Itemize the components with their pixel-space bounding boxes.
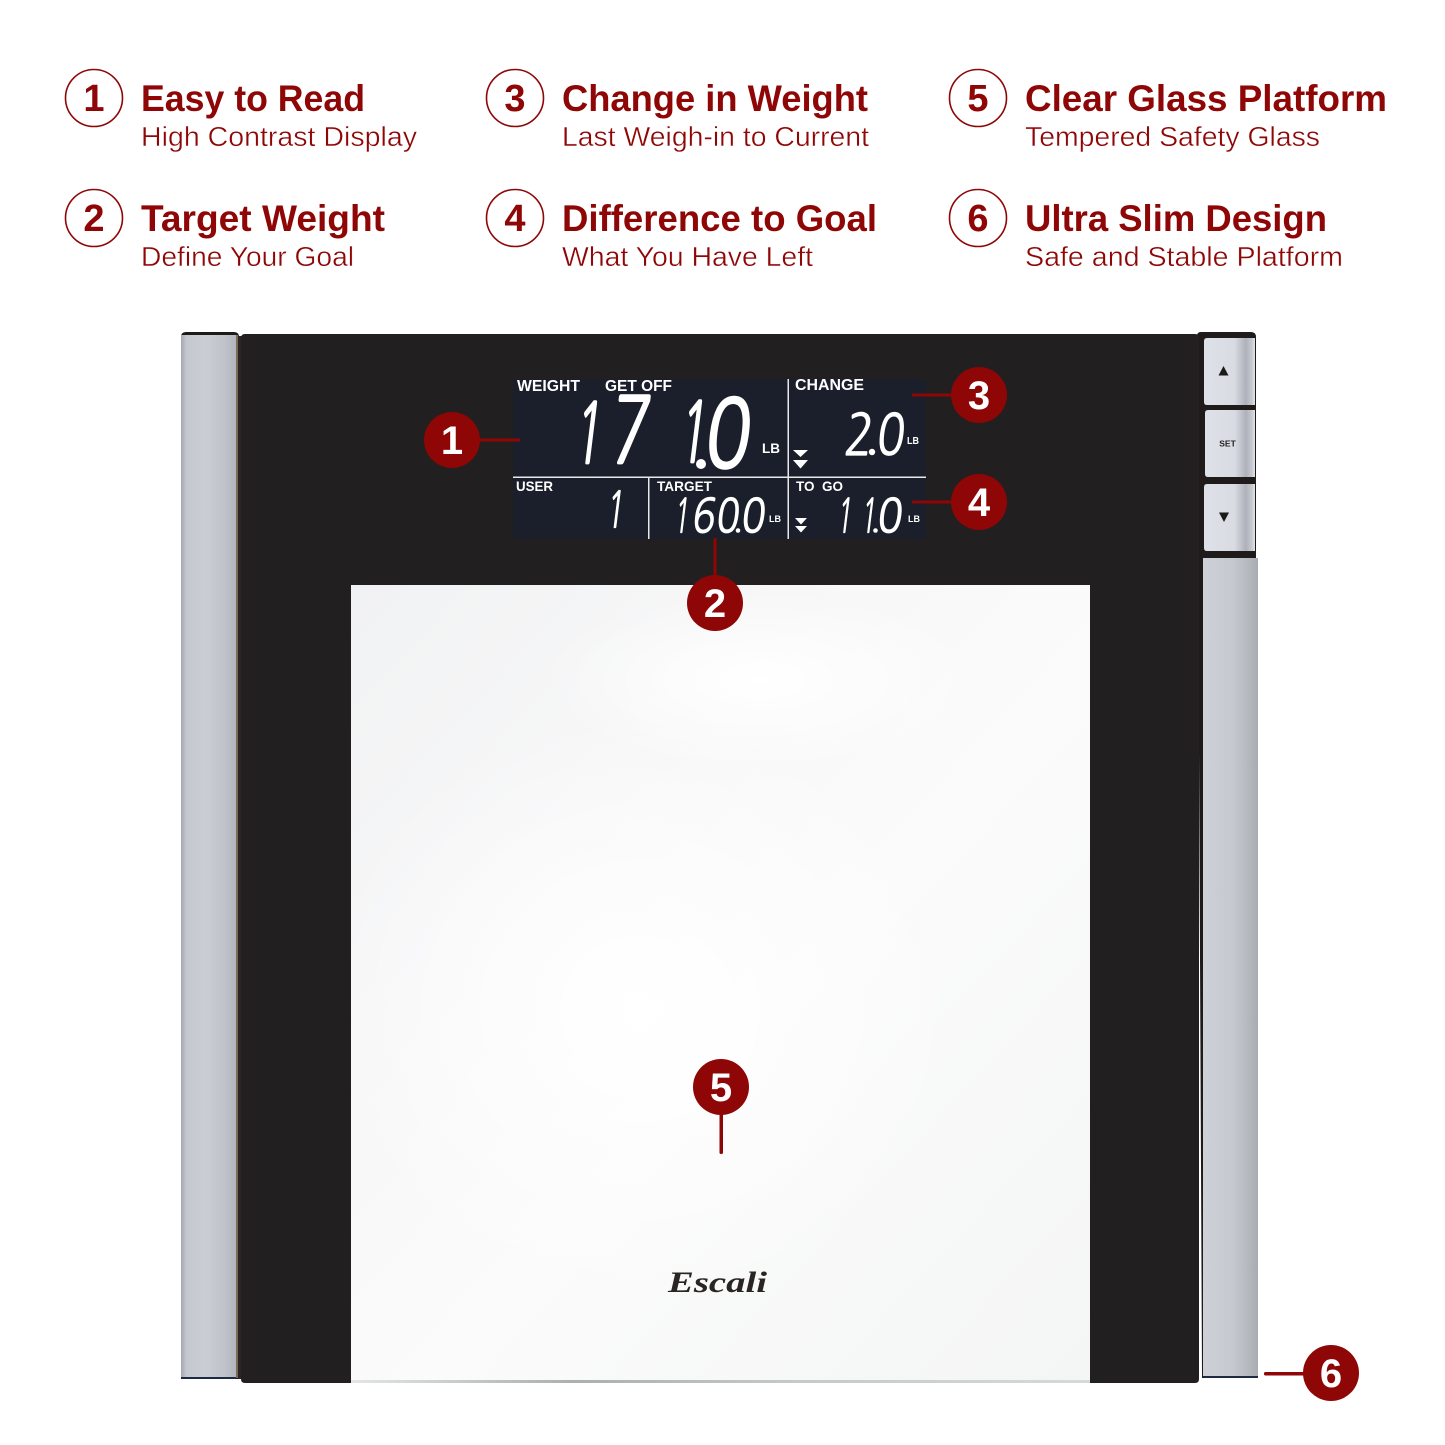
feature: Ultra Slim Design — [950, 190, 1343, 272]
target panel: 6 — [690, 493, 719, 539]
to go panel: 1 — [835, 493, 856, 539]
black scale body — [241, 334, 1199, 1383]
user panel — [516, 478, 628, 535]
weight panel: 1 — [676, 391, 714, 474]
feature: Clear Glass Platform: Clear Glass Platform — [1025, 78, 1387, 119]
feature: Target Weight: Define Your Goal — [141, 241, 354, 272]
feature: Change in Weight — [486, 70, 869, 152]
target panel: 0 — [739, 493, 769, 539]
feature: Target Weight: Target Weight — [141, 198, 385, 239]
user panel: USER — [516, 478, 553, 494]
feature: Ultra Slim Design: Safe and Stable Platform — [1025, 241, 1343, 272]
feature: Easy to Read: High Contrast Display — [141, 121, 417, 152]
target panel: 1 — [672, 493, 693, 539]
callout 1: 1 — [441, 419, 463, 463]
button: down — [1204, 484, 1255, 551]
callout 6 — [1264, 1345, 1359, 1401]
feature: Difference to Goal: Difference to Goal — [562, 198, 877, 239]
weight panel: 7 — [605, 386, 656, 477]
feature: Clear Glass Platform — [950, 70, 1387, 152]
to go panel: 0 — [875, 493, 906, 539]
feature: Change in Weight: Change in Weight — [562, 78, 868, 119]
weight panel: 0 — [700, 386, 758, 482]
change panel — [793, 377, 919, 468]
feature: Change in Weight: Last Weigh-in to Current — [562, 121, 869, 152]
logo: Escali — [667, 1266, 768, 1299]
scale product — [181, 332, 1258, 1383]
callout 2: 2 — [704, 582, 726, 626]
callout 5 — [693, 1059, 749, 1154]
feature: Ultra Slim Design: Ultra Slim Design — [1025, 198, 1327, 239]
callout 1 — [424, 412, 520, 468]
target panel — [657, 478, 781, 539]
right rail frame — [1197, 332, 1258, 1378]
callout 3: 3 — [968, 374, 990, 418]
feature: Target Weight: 2 — [83, 198, 105, 240]
feature: Target Weight — [66, 190, 385, 272]
target panel: TARGET — [657, 478, 712, 494]
change panel: LB — [907, 436, 919, 447]
weight panel — [517, 378, 780, 482]
to go panel: LB — [908, 514, 920, 525]
LCD display — [513, 377, 926, 539]
callout 6: 6 — [1320, 1352, 1342, 1396]
button: set: SET — [1219, 438, 1237, 448]
change panel: 0 — [874, 407, 909, 464]
target panel: 0 — [714, 493, 743, 539]
weight panel: WEIGHT — [517, 378, 581, 395]
target panel: LB — [769, 514, 781, 524]
feature: Difference to Goal: 4 — [504, 198, 526, 240]
feature: Clear Glass Platform: 5 — [967, 78, 989, 120]
feature: Change in Weight: 3 — [504, 78, 526, 120]
to go panel: 1 — [859, 493, 880, 539]
lower right silver rail — [1203, 558, 1258, 1378]
feature: Difference to Goal — [486, 190, 877, 272]
to go panel — [795, 478, 920, 539]
feature: Easy to Read: Easy to Read — [141, 78, 365, 119]
button: up — [1204, 338, 1255, 405]
button: set — [1205, 410, 1255, 477]
glass platform — [320, 585, 1090, 1383]
change panel: 2 — [842, 407, 877, 464]
feature: Clear Glass Platform: Tempered Safety Glass — [1025, 121, 1320, 152]
weight panel: LB — [762, 441, 780, 456]
change panel: CHANGE — [795, 377, 864, 394]
weight panel: 1 — [571, 392, 609, 475]
feature: Ultra Slim Design: 6 — [967, 198, 989, 240]
callout 4 — [912, 474, 1007, 530]
feature: Difference to Goal: What You Have Left — [562, 241, 813, 272]
callout 4: 4 — [968, 481, 991, 525]
feature: Easy to Read — [66, 70, 417, 152]
user panel: 1 — [604, 486, 628, 535]
callout 2 — [687, 538, 743, 631]
callout 5: 5 — [710, 1066, 732, 1110]
weight panel: GET OFF — [605, 378, 672, 395]
callout 3 — [912, 367, 1007, 423]
left silver rail — [181, 332, 242, 1379]
feature: Easy to Read: 1 — [83, 78, 105, 120]
to go panel: TO GO — [796, 478, 843, 494]
